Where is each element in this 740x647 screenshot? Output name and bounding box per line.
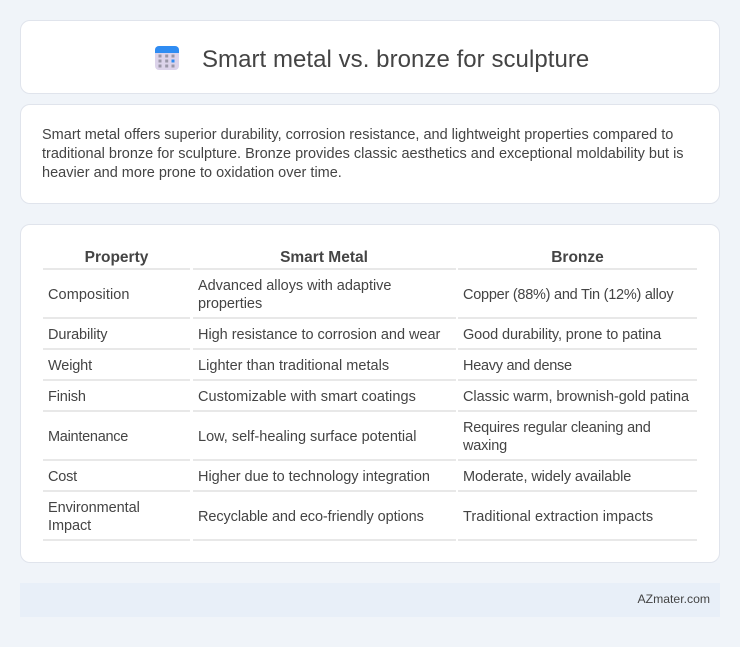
row: Maintenance: Maintenance [48,429,128,445]
table header: Smart Metal: Smart Metal [280,249,368,266]
row: Durability: Good durability, prone to patina [463,327,661,343]
row: Environmental Impact: Environmental [48,500,140,516]
row: Environmental Impact: Impact [48,518,91,534]
row: Weight [48,358,572,374]
row: Environmental Impact: Traditional extraction impacts [463,509,653,525]
row: Finish: Classic warm, brownish-gold patina [463,389,689,405]
row: Environmental Impact: Recyclable and eco-friendly options [198,509,424,525]
footer bar [20,583,720,617]
table header: Property: Property [85,249,148,266]
footer source text: AZmater.com [638,592,710,606]
title: Smart metal vs. bronze for sculpture [202,46,589,73]
row: Maintenance: Low, self-healing surface potential [198,429,416,445]
row: Composition [48,278,674,312]
row: Durability [48,327,662,343]
row: Cost: Moderate, widely available [463,469,631,485]
row: Composition: Advanced alloys with adaptive [198,278,391,294]
row: Composition: Copper (88%) and Tin (12%) alloy [463,287,673,303]
row: Cost: Higher due to technology integration [198,469,430,485]
row: Finish [48,389,690,405]
row: Durability: High resistance to corrosion and wear [198,327,440,343]
row: Maintenance [48,420,651,454]
row: Weight: Heavy and dense [463,358,572,374]
icon: calendar [155,46,179,70]
row: Maintenance: Requires regular cleaning and [463,420,651,436]
row: Finish: Finish [48,389,86,405]
panel: title card [20,20,720,94]
row: Finish: Customizable with smart coatings [198,389,416,405]
summary text: traditional bronze for sculpture. Bronze provides classic aesthetics and exceptional moldability but is [42,146,684,162]
panel: comparison table [20,224,720,563]
summary text: Smart metal offers superior durability, corrosion resistance, and lightweight properties compared to [42,127,673,143]
table header: Bronze: Bronze [551,249,604,266]
row: Maintenance: waxing [463,438,507,454]
row: Weight: Weight [48,358,92,374]
panel: summary [20,104,720,204]
row: Environmental Impact [48,500,653,534]
row: Cost [48,469,631,485]
row: Weight: Lighter than traditional metals [198,358,389,374]
row: Composition: Composition [48,287,130,303]
row: Cost: Cost [48,469,77,485]
summary text: heavier and more prone to oxidation over time. [42,165,342,181]
summary text [42,127,684,181]
row: Composition: properties [198,296,262,312]
row: Durability: Durability [48,327,107,343]
